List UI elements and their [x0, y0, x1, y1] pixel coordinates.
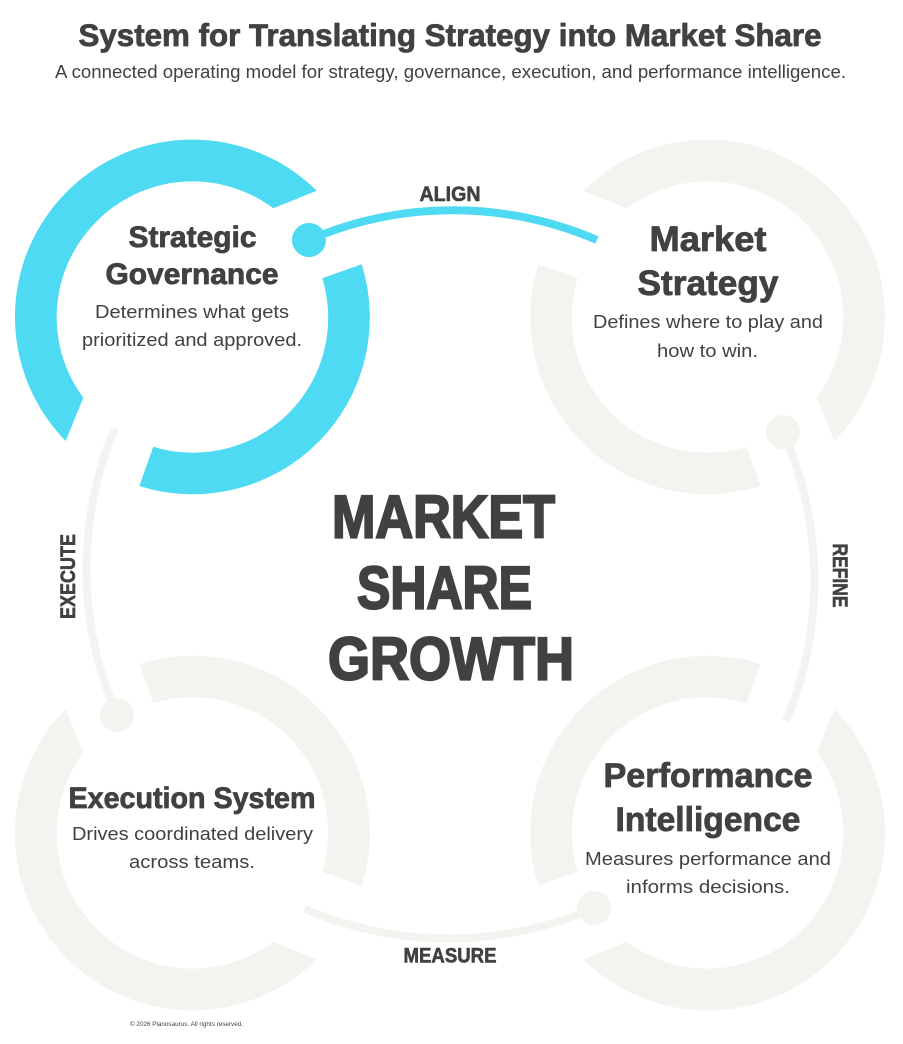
heading: strategic governance [106, 221, 278, 291]
description: market strategy [593, 312, 823, 361]
ring: market strategy [530, 140, 885, 494]
description: market strategy: Defines where to play and [593, 312, 823, 332]
description: market strategy: how to win. [657, 341, 758, 361]
heading: execution system: Execution System [68, 782, 316, 815]
label: align: ALIGN [420, 183, 480, 206]
label: measure: MEASURE [404, 944, 496, 968]
heading: performance intelligence: Performance [604, 757, 812, 795]
panel: market strategy [530, 140, 885, 494]
description: strategic governance: Determines what gets [95, 302, 289, 322]
description: strategic governance [82, 302, 302, 350]
ring: execution system [15, 656, 370, 1010]
description: execution system [72, 824, 313, 872]
panel: execution system [15, 656, 370, 1010]
description: execution system: across teams. [129, 852, 255, 872]
arrow: align connector [292, 210, 597, 257]
description: performance intelligence [585, 849, 831, 897]
subtitle: A connected operating model for strategy, governance, execution, and performance intelligence. [55, 62, 846, 82]
footer copyright: © 2026 Planosaurus. All rights reserved. [130, 1021, 243, 1028]
center heading: market share growth [328, 484, 574, 692]
ring: performance intelligence [530, 656, 885, 1010]
description: performance intelligence: Measures performance and [585, 849, 831, 869]
center heading: market share growth: SHARE [357, 554, 532, 622]
center heading: market share growth: GROWTH [328, 626, 574, 692]
heading: market strategy: Market [650, 220, 767, 259]
heading: market strategy [638, 220, 779, 303]
heading: strategic governance: Strategic [128, 221, 256, 254]
label: refine: REFINE [828, 544, 851, 608]
panel: strategic governance [15, 140, 370, 494]
ring: strategic governance [15, 140, 370, 494]
center heading: market share growth: MARKET [332, 484, 555, 550]
arrow: refine connector [766, 415, 814, 721]
arrow: execute connector [87, 428, 134, 732]
heading: performance intelligence: Intelligence [616, 801, 800, 839]
description: performance intelligence: informs decisions. [626, 877, 790, 897]
arrow: measure connector [305, 891, 611, 938]
heading: performance intelligence [604, 757, 812, 839]
heading: strategic governance: Governance [106, 258, 278, 291]
description: strategic governance: prioritized and approved. [82, 330, 302, 350]
panel: performance intelligence [530, 656, 885, 1010]
label: execute: EXECUTE [57, 534, 80, 619]
heading: market strategy: Strategy [638, 264, 779, 303]
title: System for Translating Strategy into Market Share [78, 17, 822, 53]
description: execution system: Drives coordinated delivery [72, 824, 313, 844]
